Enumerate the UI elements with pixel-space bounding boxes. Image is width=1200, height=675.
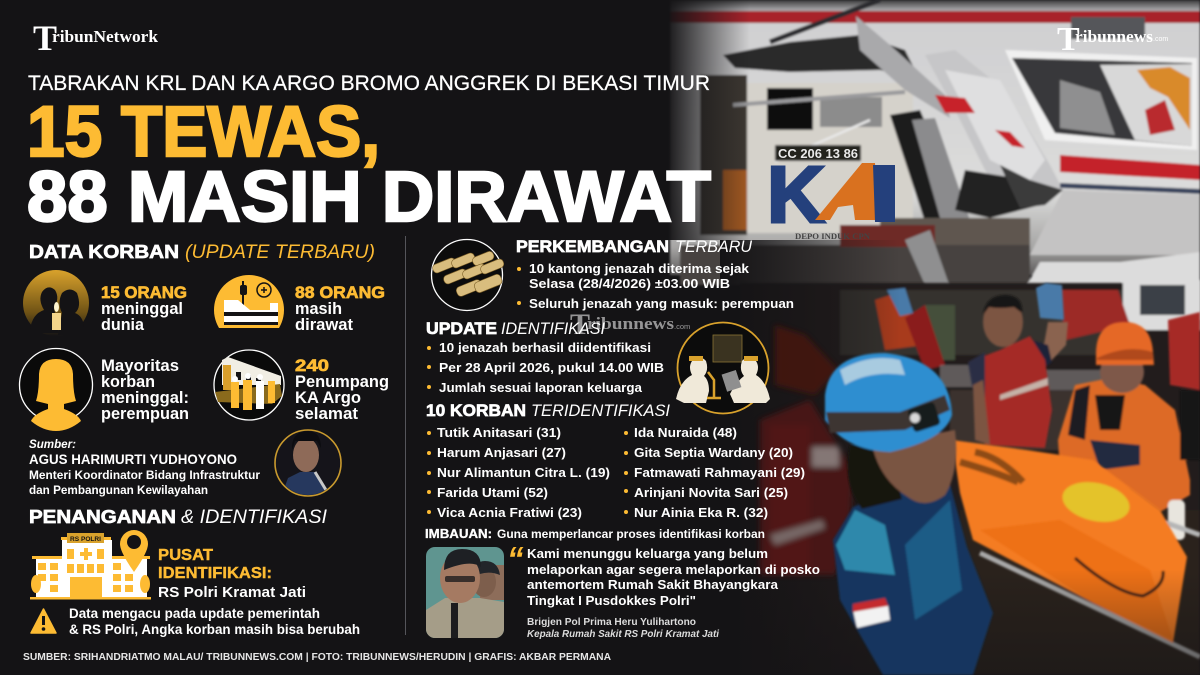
- photo: KAI livery logo: [767, 147, 895, 241]
- source: AHY: Sumber:: [29, 439, 76, 451]
- heading: data korban: [29, 241, 375, 263]
- icon: warning triangle: [31, 609, 56, 633]
- heading: perkembangan terbaru: PERKEMBANGAN: [516, 238, 669, 256]
- watermark: tribunnews: [570, 308, 690, 341]
- logo: Tribun Network: T: [33, 18, 57, 58]
- subtitle: TABRAKAN KRL DAN KA ARGO BROMO ANGGREK DI BEKASI TIMUR: [28, 72, 710, 95]
- watermark: tribunnews: T: [570, 308, 590, 341]
- list: perkembangan: [517, 261, 794, 311]
- text: disclaimer: Data mengacu pada update pemerintah: [69, 606, 320, 621]
- panel: 10 korban teridentifikasi: [426, 402, 805, 520]
- stat: 240 penumpang: selamat: [295, 405, 359, 423]
- photo left fade upper: [665, 0, 750, 240]
- stat: mayoritas perempuan: meninggal:: [101, 389, 189, 407]
- stat: 240 penumpang: Penumpang: [295, 373, 389, 391]
- stat: 240 penumpang: KA Argo: [295, 389, 361, 407]
- list: victims column 1: Tutik Anitasari (31): [437, 425, 561, 440]
- photo: KAI livery logo: K: [767, 150, 825, 239]
- list: update identifikasi: 10 jenazah berhasil diidentifikasi: [439, 340, 651, 355]
- text: imbauan: IMBAUAN:: [425, 527, 492, 541]
- list: victims column 2: Gita Septia Wardany (20): [634, 445, 793, 460]
- source: AHY: Menteri Koordinator Bidang Infrastruktur: [29, 470, 261, 482]
- list: victims column 2: Ida Nuraida (48): [634, 425, 737, 440]
- panel: imbauan: [425, 527, 820, 640]
- heading: 10 korban: TERIDENTIFIKASI: [531, 402, 670, 420]
- photo: dim medic on the left: [760, 325, 853, 575]
- list: victims column 1: [427, 425, 610, 520]
- logo: Tribunnews: T: [1057, 21, 1080, 58]
- panel: perkembangan terbaru: [431, 238, 794, 311]
- heading: update identifikasi: IDENTIFIKASI: [501, 320, 605, 338]
- heading: 10 korban: 10 KORBAN: [426, 402, 526, 420]
- list: update identifikasi: [427, 340, 664, 395]
- photo: police officer: [426, 547, 504, 638]
- stat: 15 orang: dunia: [101, 316, 145, 334]
- text: pusat identifikasi: IDENTIFIKASI:: [158, 565, 272, 582]
- heading: penanganan: & IDENTIFIKASI: [181, 507, 328, 528]
- quote: melaporkan agar segera melaporkan di posko: [527, 562, 820, 577]
- stat: mayoritas perempuan: [101, 357, 189, 423]
- source: AHY: [29, 439, 261, 497]
- logo: Tribunnews: [1057, 21, 1168, 58]
- icon: forensic scientists: [676, 322, 770, 414]
- heading: update identifikasi: UPDATE: [426, 320, 497, 338]
- stat: 240 penumpang: [295, 356, 389, 423]
- logo: Tribunnews: .com: [1153, 36, 1168, 43]
- logo: Tribun Network: ribunNetwork: [52, 27, 159, 46]
- stat: 88 orang: [295, 283, 385, 334]
- list: perkembangan: Seluruh jenazah yang masuk: perempuan: [529, 296, 794, 311]
- icon: hospital bed: [214, 275, 284, 328]
- photo: KAI livery logo: DEPO INDUK CPN: [795, 232, 870, 241]
- panel: penanganan dan identifikasi: [29, 506, 360, 637]
- stat: 88 orang: masih: [295, 300, 342, 318]
- icon: hospital RS Polri with pin: [30, 530, 151, 600]
- list: perkembangan: 10 kantong jenazah diterima sejak: [529, 261, 750, 276]
- list: victims column 2: [624, 425, 805, 520]
- logo: Tribun Network: [33, 18, 159, 58]
- text: disclaimer: & RS Polri, Angka korban masih bisa berubah: [69, 622, 360, 637]
- quote attribution: Brigjen Pol Prima Heru Yulihartono: [527, 617, 696, 628]
- source: AHY: AGUS HARIMURTI YUDHOYONO: [29, 452, 237, 467]
- stat: 88 orang: 88 ORANG: [295, 283, 385, 302]
- list: victims column 1: Nur Alimantun Citra L. (19): [437, 465, 610, 480]
- text: disclaimer: [69, 606, 360, 637]
- photo left fade lower: [720, 240, 900, 675]
- stat: mayoritas perempuan: Mayoritas: [101, 357, 179, 375]
- watermark: tribunnews: .com: [674, 322, 690, 331]
- watermark: tribunnews: ribunnews: [587, 314, 674, 333]
- quote: Tingkat I Pusdokkes Polri": [527, 593, 696, 608]
- photo: damaged KRL train: [670, 0, 1200, 330]
- list: victims column 1: Farida Utami (52): [437, 485, 548, 500]
- panel: data korban: [20, 241, 389, 500]
- photo: KAI livery logo: CC 206 13 86: [778, 147, 858, 161]
- stat: 15 orang: 15 ORANG: [101, 283, 187, 302]
- list: victims column 2: Nur Ainia Eka R. (32): [634, 505, 768, 520]
- list: perkembangan: Selasa (28/4/2026) ±03.00 WIB: [529, 276, 730, 291]
- quote attribution: [527, 617, 719, 640]
- photo: rescuer in orange: [1058, 312, 1200, 540]
- quote mark: “: [507, 540, 524, 577]
- stat: mayoritas perempuan: perempuan: [101, 405, 189, 423]
- icon: woman silhouette: [20, 348, 92, 431]
- heading: perkembangan terbaru: TERBARU: [675, 238, 752, 256]
- heading: perkembangan terbaru: [516, 238, 752, 256]
- source: AHY: dan Pembangunan Kewilayahan: [29, 485, 208, 497]
- heading: penanganan: PENANGANAN: [29, 506, 176, 527]
- list: update identifikasi: Jumlah sesuai laporan keluarga: [439, 380, 643, 395]
- photo: AHY portrait: [275, 430, 341, 500]
- photo bottom shade: [740, 570, 1200, 675]
- list: update identifikasi: Per 28 April 2026, pukul 14.00 WIB: [439, 360, 664, 375]
- text: pusat identifikasi: PUSAT: [158, 547, 213, 564]
- stat: mayoritas perempuan: korban: [101, 373, 155, 391]
- list: victims column 1: Harum Anjasari (27): [437, 445, 566, 460]
- photo: medic in red vest: [968, 283, 1068, 448]
- panel: update identifikasi: [426, 308, 770, 414]
- photo: rescue crowd background: [740, 280, 1200, 675]
- list: victims column 1: Vica Acnia Fratiwi (23): [437, 505, 582, 520]
- heading: data korban: (UPDATE TERBARU): [185, 242, 375, 263]
- icon: train passengers: [214, 350, 284, 420]
- logo: Tribunnews: ribunnews: [1075, 27, 1153, 46]
- title line 2: 88 MASIH DIRAWAT: [27, 158, 711, 237]
- stat: 88 orang: dirawat: [295, 316, 353, 334]
- photo: rescuer with blue helmet: [825, 353, 993, 675]
- quote: [527, 546, 820, 608]
- text: pusat identifikasi: RS Polri Kramat Jati: [158, 584, 306, 601]
- text: imbauan: Guna memperlancar proses identifikasi korban: [497, 527, 765, 541]
- quote: Kami menunggu keluarga yang belum: [527, 546, 768, 561]
- footer credits: SUMBER: SRIHANDRIATMO MALAU/ TRIBUNNEWS.COM | FOTO: TRIBUNNEWS/HERUDIN | GRAFIS: AKBAR PERMANA: [23, 652, 611, 663]
- quote attribution: Kepala Rumah Sakit RS Polri Kramat Jati: [527, 629, 719, 640]
- icon: hospital RS Polri with pin: RS POLRI: [70, 536, 101, 543]
- heading: 10 korban: [426, 402, 670, 420]
- icon: body bags: [431, 240, 505, 310]
- title line 1: 15 TEWAS,: [27, 93, 380, 172]
- stat: 15 orang: meninggal: [101, 300, 183, 318]
- quote: antemortem Rumah Sakit Bhayangkara: [527, 577, 779, 592]
- heading: data korban: DATA KORBAN: [29, 241, 179, 262]
- text: pusat identifikasi: [158, 547, 306, 601]
- icon: mourning silhouettes with candle: [23, 270, 89, 336]
- list: victims column 2: Fatmawati Rahmayani (29): [634, 465, 805, 480]
- heading: penanganan: [29, 506, 328, 528]
- list: victims column 2: Arinjani Novita Sari (25): [634, 485, 788, 500]
- heading: update identifikasi: [426, 320, 605, 338]
- photo: orange body bag on stretcher: [952, 440, 1200, 657]
- stat: 240 penumpang: 240: [295, 356, 329, 375]
- stat: 15 orang: [101, 283, 187, 334]
